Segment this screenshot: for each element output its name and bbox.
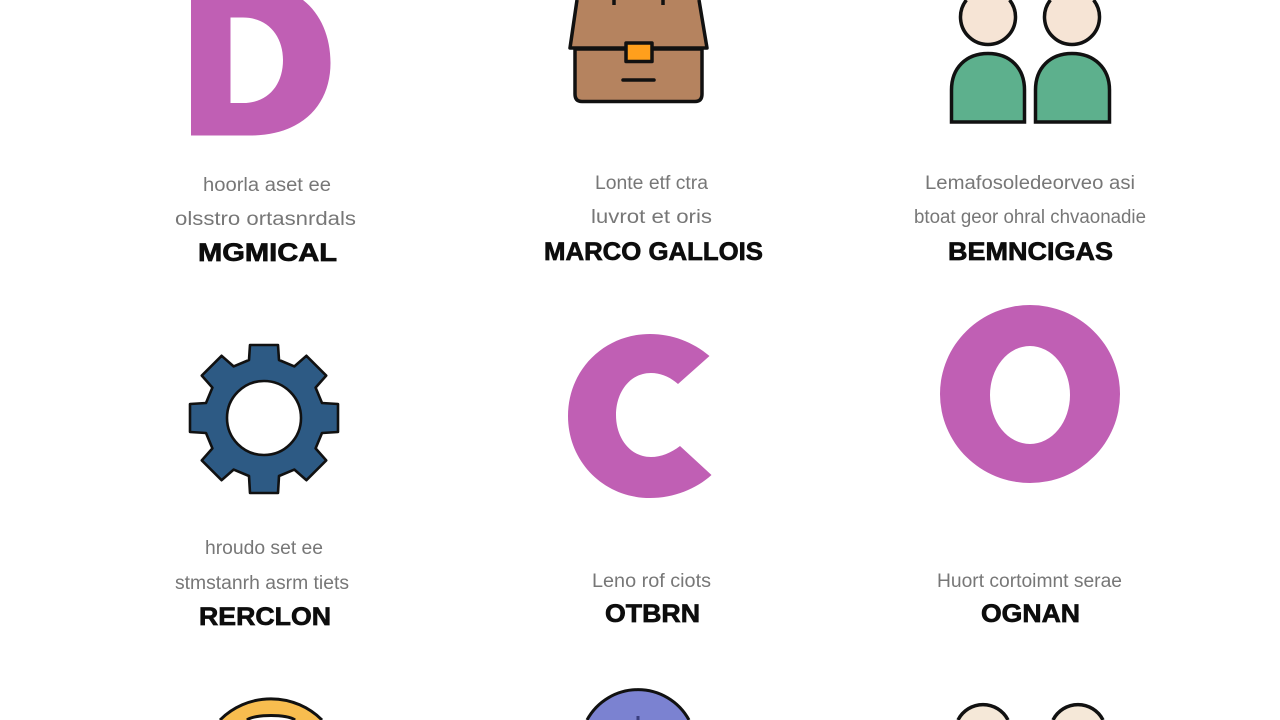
- text: O description: Huort cortoimnt serae: [937, 571, 1122, 592]
- panel: people card: [914, 0, 1146, 266]
- icon: yellow badge, cropped: [220, 699, 322, 720]
- icon: letter O: [940, 305, 1120, 483]
- text: gear description line 2: stmstanrh asrm tiets: [175, 573, 349, 594]
- heading: gear label: RERCLON: [199, 603, 331, 631]
- icon: briefcase: [570, 0, 707, 102]
- text: D description line 1: hoorla aset ee: [203, 175, 331, 196]
- panel: O card: [937, 305, 1122, 628]
- text: people description line 2: btoat geor ohral chvaonadie: [914, 207, 1146, 228]
- text: people description line 1: Lemafosoledeorveo asi: [925, 173, 1135, 194]
- heading: O label: OGNAN: [981, 600, 1080, 628]
- text: briefcase description line 2: luvrot et oris: [591, 207, 712, 228]
- text: briefcase description line 1: Lonte etf ctra: [595, 173, 708, 194]
- panel: D card: [175, 0, 356, 267]
- heading: C label: OTBRN: [605, 600, 700, 628]
- text: gear description line 1: hroudo set ee: [205, 538, 323, 559]
- icon: gear: [190, 345, 338, 493]
- panel: gear card: [175, 345, 349, 631]
- heading: D label: MGMICAL: [198, 239, 337, 267]
- icon: two people, cropped: [958, 705, 1103, 720]
- heading: people label: BEMNCIGAS: [948, 238, 1113, 266]
- icon: letter D: [191, 0, 330, 136]
- icon: blue circle, cropped: [587, 690, 689, 720]
- text: C description: Leno rof ciots: [592, 571, 711, 592]
- panel: C card: [568, 334, 712, 628]
- icon: letter C: [568, 334, 712, 498]
- icon: two people: [952, 0, 1110, 122]
- panel: briefcase card: [544, 0, 763, 266]
- text: D description line 2: olsstro ortasnrdals: [175, 209, 356, 230]
- heading: briefcase label: MARCO GALLOIS: [544, 238, 763, 266]
